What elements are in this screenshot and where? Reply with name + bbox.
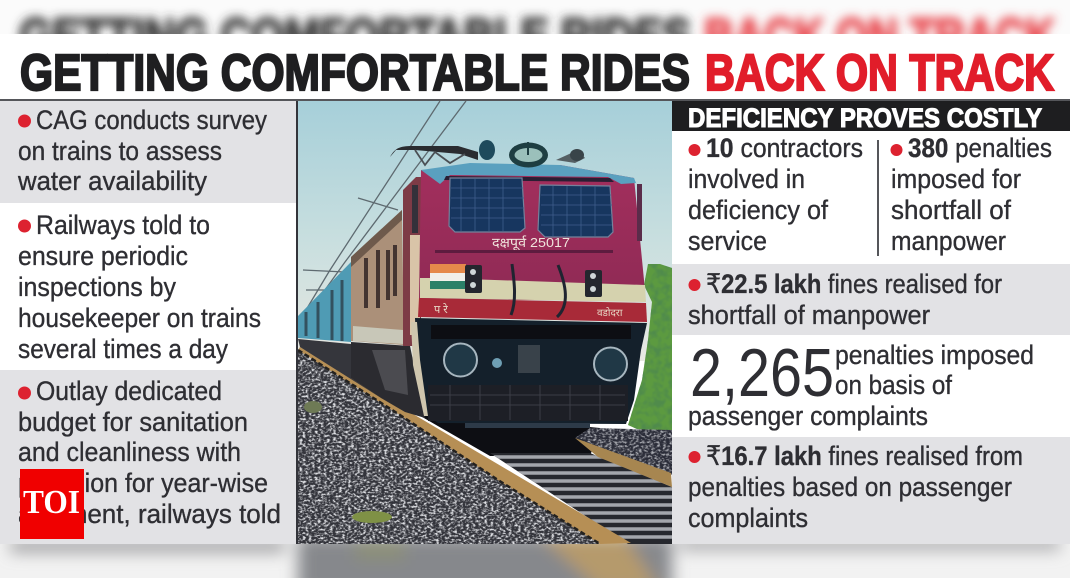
stat: 2,265 penalties: penalties imposed: [835, 340, 1034, 370]
marker lights: [465, 265, 482, 293]
stat: 10 contractors: involved in: [688, 164, 805, 194]
item: inspections: housekeeper on trains: [18, 303, 261, 333]
panel: deficiency proves costly: [672, 101, 1070, 544]
locomotive front: वडोदरा: [597, 307, 623, 319]
stat: 16.7 lakh fines: penalties based on passenger: [688, 472, 1012, 502]
blurred top strip: GETTING COMFORTABLE RIDES: [19, 8, 691, 65]
sky: [298, 101, 672, 361]
cream stripe: [420, 278, 646, 302]
side coaches: [298, 262, 381, 398]
panel: recommendations: [0, 101, 297, 544]
stat: 22.5 lakh fines: [672, 264, 1070, 335]
item: budget: allotment, railways told: [18, 499, 281, 529]
item: budget: and cleanliness with: [18, 437, 241, 467]
blurred bottom strip: [0, 536, 1070, 578]
item: inspections: ensure periodic: [18, 241, 188, 271]
stat: 380 penalties: [890, 133, 1052, 256]
logo: TOI: TOI: [23, 484, 80, 521]
stat: 380 penalties: imposed for: [891, 164, 1021, 194]
magenta body: [419, 165, 645, 300]
item: survey: [0, 101, 297, 203]
side handle: [637, 184, 642, 241]
locomotive front: [411, 163, 647, 428]
blurred top strip: [10, 8, 1062, 34]
trees: [628, 264, 672, 430]
buffer beam: [465, 423, 590, 428]
lower panels: [431, 325, 631, 339]
left rail: [298, 347, 631, 544]
ballast left: [298, 352, 600, 544]
locomotive side: [351, 177, 425, 418]
item: inspections: Railways told to: [36, 210, 210, 240]
stat: 380 penalties: shortfall of: [891, 195, 1011, 225]
hoses: [511, 264, 515, 315]
title: GETTING COMFORTABLE RIDES: [20, 44, 690, 101]
item: inspections: inspections by: [18, 272, 176, 302]
stat: 380 penalties: 380 penalties: [908, 133, 1052, 163]
title: [0, 34, 1070, 101]
roof: [421, 163, 636, 184]
roof equipment: [390, 140, 585, 168]
dark lower front: [415, 318, 647, 424]
item: inspections: [0, 203, 297, 370]
item: survey: on trains to assess: [18, 136, 222, 166]
number: दक्षपूर्व 25017: [492, 235, 570, 251]
overhead wires: [300, 101, 466, 322]
stat: 16.7 lakh fines: [672, 437, 1070, 544]
stat: 10 contractors: [688, 133, 863, 256]
stat: 2,265 penalties: [688, 335, 1034, 431]
headlights: [444, 344, 477, 376]
item: budget: [0, 370, 297, 544]
logo: TOI: [20, 469, 84, 539]
item: budget: budget for sanitation: [18, 407, 248, 437]
flag: [430, 264, 466, 289]
locomotive front: प रे: [434, 303, 448, 316]
stat: 2,265 penalties: passenger complaints: [688, 401, 928, 431]
item: survey: water availability: [17, 166, 207, 196]
stat: 380 penalties: manpower: [891, 226, 1006, 256]
item: survey: CAG conducts survey: [36, 105, 267, 135]
stat: 10 contractors: service: [688, 226, 767, 256]
stat: 22.5 lakh fines: ₹22.5 lakh fines realised for: [706, 269, 1002, 299]
stat: 10 contractors: deficiency of: [688, 195, 828, 225]
sleepers and right track: [410, 410, 672, 544]
stat: 2,265 penalties: 2,265: [690, 335, 834, 411]
stat: 16.7 lakh fines: complaints: [688, 503, 808, 533]
photo: locomotive on track: [298, 101, 672, 544]
stat: 16.7 lakh fines: ₹16.7 lakh fines realised from: [706, 441, 1023, 471]
windows: [449, 178, 613, 237]
red band: [418, 298, 647, 322]
item: budget: provision for year-wise: [18, 468, 268, 498]
stat: 2,265 penalties: on basis of: [835, 370, 952, 400]
stat: 22.5 lakh fines: shortfall of manpower: [688, 300, 930, 330]
item: inspections: several times a day: [18, 334, 228, 364]
stat: 10 contractors: 10 contractors: [706, 133, 863, 163]
grille: [428, 385, 628, 421]
item: budget: Outlay dedicated: [36, 376, 222, 406]
